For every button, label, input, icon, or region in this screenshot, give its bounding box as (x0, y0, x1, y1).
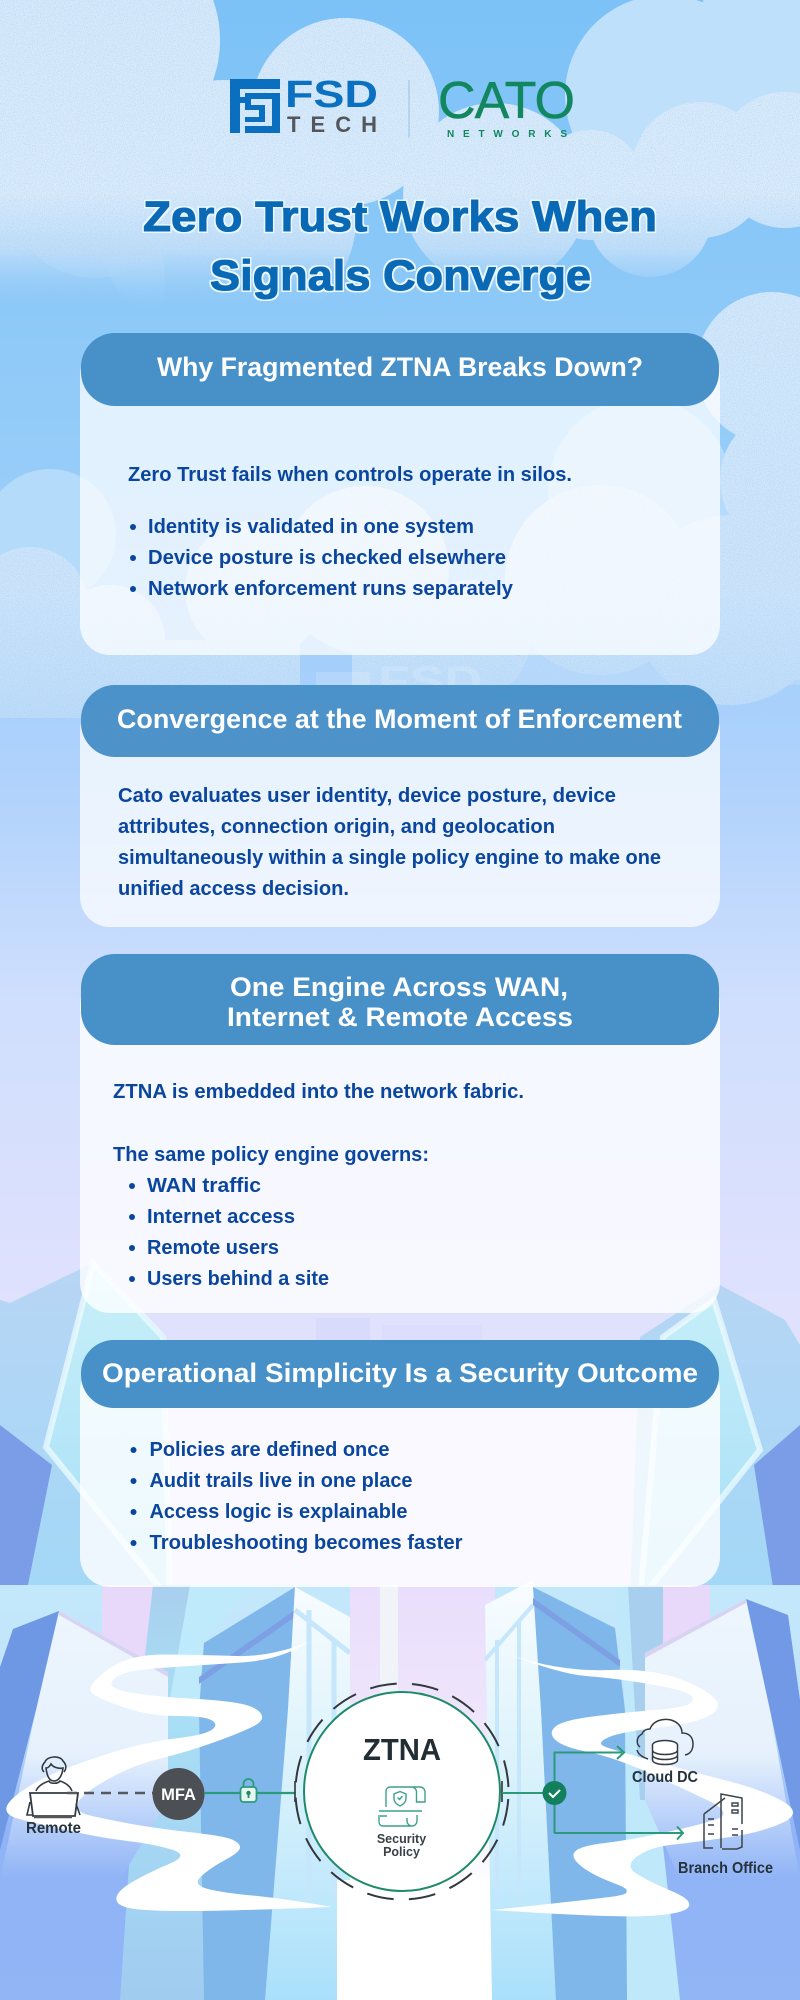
background: skyline towers (0, 1580, 800, 2000)
icon: remote user with laptop (27, 1757, 80, 1817)
label: Security Policy: Policy (383, 1845, 420, 1859)
list: fragmented controls: Network enforcement runs separately (148, 578, 514, 600)
heading: one engine: One Engine Across WAN, (230, 972, 568, 1002)
text: convergence description: attributes, connection origin, and geolocation (118, 816, 555, 838)
text: governs intro: The same policy engine governs: (113, 1144, 429, 1166)
heading: one engine (81, 954, 719, 1045)
panel: One Engine Across WAN, Internet and Remote Access (80, 954, 720, 1313)
list: fragmented controls (130, 516, 514, 600)
logo divider (408, 80, 410, 138)
list: fragmented controls: Device posture is checked elsewhere (148, 547, 506, 569)
watermark logos: FSD (378, 657, 482, 704)
watermark logos: TECH (380, 705, 480, 730)
heading: operational simplicity: Operational Simplicity Is a Security Outcome (102, 1358, 698, 1388)
icon: cloud data centre (637, 1719, 693, 1764)
text: silos statement: Zero Trust fails when controls operate in silos. (128, 464, 572, 486)
list: simplicity outcomes (130, 1439, 463, 1554)
tick marks (295, 1781, 502, 1802)
list: simplicity outcomes: Access logic is explainable (150, 1501, 408, 1523)
list: simplicity outcomes: Troubleshooting becomes faster (150, 1532, 463, 1554)
dashed connector (67, 1792, 153, 1794)
icon: approved check (542, 1781, 566, 1805)
label: Branch Office: Branch Office (678, 1860, 773, 1877)
heading: why fragmented (81, 333, 719, 406)
heading: why fragmented: Why Fragmented ZTNA Breaks Down? (157, 352, 643, 382)
icon: security policy scroll (379, 1787, 425, 1826)
list: governed traffic: Users behind a site (147, 1268, 329, 1290)
MFA badge: MFA (161, 1786, 196, 1804)
text: convergence description: Cato evaluates user identity, device posture, device (118, 785, 616, 807)
panel: Why Fragmented ZTNA Breaks Down (80, 333, 720, 655)
logo: FSD Tech (230, 74, 378, 137)
text: embedded statement: ZTNA is embedded into the network fabric. (113, 1081, 524, 1103)
label: ZTNA: ZTNA (363, 1732, 441, 1767)
heading: convergence: Convergence at the Moment of Enforcement (117, 704, 682, 734)
heading: one engine: Internet & Remote Access (227, 1002, 573, 1032)
ZTNA main circle (304, 1692, 500, 1891)
logo: Cato Networks: NETWORKS (447, 129, 567, 140)
label: Security Policy (377, 1832, 426, 1859)
list: simplicity outcomes: Audit trails live in one place (150, 1470, 412, 1492)
list: governed traffic (129, 1175, 329, 1290)
icon: branch office building (704, 1794, 742, 1849)
green connector left (204, 1792, 295, 1794)
text: convergence description: unified access decision. (118, 878, 349, 900)
text: convergence description (118, 785, 661, 900)
icon: FSD mark (230, 79, 280, 133)
label: Cloud DC: Cloud DC (632, 1769, 698, 1786)
logo: Cato Networks: CATO (438, 72, 575, 130)
heading: convergence (81, 685, 719, 757)
title: Signals Converge (210, 252, 591, 300)
background: left buildings behind cards (0, 1263, 170, 1640)
title: Zero Trust Works When (143, 193, 657, 241)
label: Remote: Remote (26, 1820, 81, 1837)
white ribbon: left (6, 1642, 332, 1911)
MFA badge (152, 1768, 204, 1820)
label: Security Policy: Security (377, 1832, 426, 1846)
title (143, 193, 657, 300)
background: right buildings behind cards (630, 1285, 800, 1640)
green connector right with branches (502, 1746, 683, 1840)
list: governed traffic: Internet access (147, 1206, 295, 1228)
list: simplicity outcomes: Policies are defined once (150, 1439, 390, 1461)
diagram: ZTNA network flow (26, 1684, 773, 1900)
heading: operational simplicity (81, 1340, 719, 1408)
dashed outer ring (296, 1684, 508, 1900)
panel: Operational Simplicity Is a Security Outcome (80, 1340, 720, 1587)
watermark logos (316, 657, 482, 730)
logo: FSD Tech: FSD (285, 74, 378, 116)
list: governed traffic: Remote users (147, 1237, 279, 1259)
watermark logo between cards (316, 1318, 482, 1340)
logo: FSD Tech: TECH (287, 112, 377, 137)
panel: Convergence at the Moment of Enforcement (80, 685, 720, 927)
list: governed traffic: WAN traffic (147, 1175, 261, 1197)
icon: lock (240, 1779, 256, 1802)
text: convergence description: simultaneously within a single policy engine to make one (118, 847, 661, 869)
background: upper clouds (0, 0, 800, 720)
white ribbon: right (492, 1655, 793, 1916)
list: fragmented controls: Identity is validated in one system (148, 516, 474, 538)
